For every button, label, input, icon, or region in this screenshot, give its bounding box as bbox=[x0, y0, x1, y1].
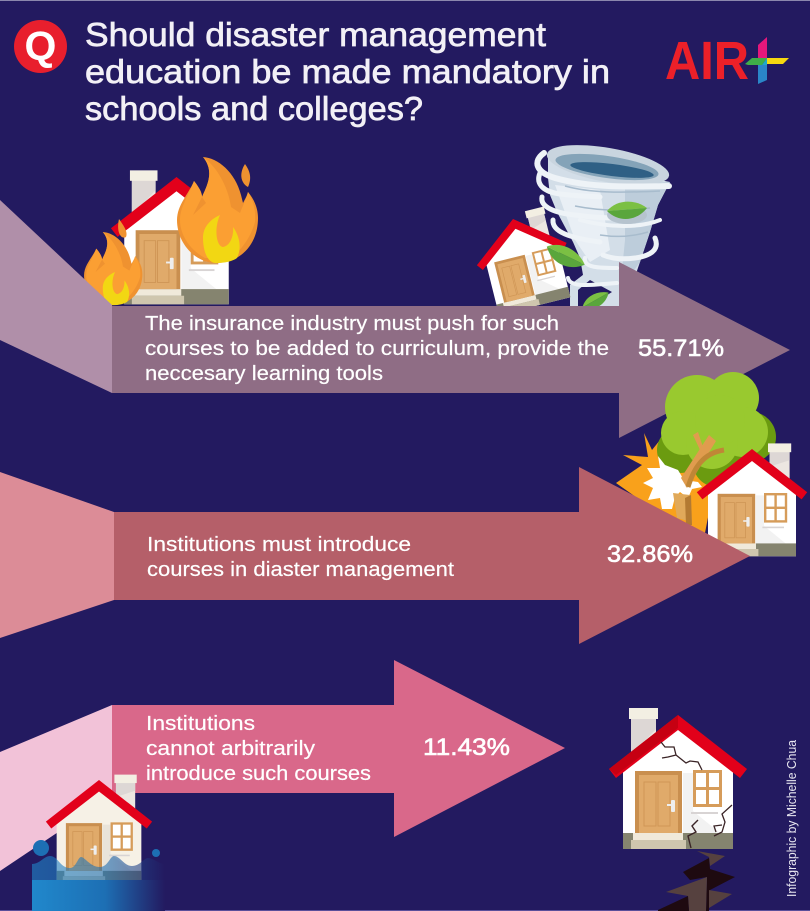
text: institutions must introduce: Institutions must introduce bbox=[147, 534, 411, 556]
icon: tornado with house bbox=[468, 137, 672, 317]
title: Should disaster management bbox=[85, 16, 546, 53]
text: institutions must introduce: courses in diaster management bbox=[147, 559, 454, 581]
title bbox=[85, 16, 610, 127]
text: insurance industry bbox=[145, 313, 609, 385]
icon: Q badge bbox=[14, 20, 67, 73]
value: 32.86%: 32.86% bbox=[607, 541, 693, 568]
arrow: 11.43% bbox=[0, 660, 565, 871]
text: insurance industry: neccesary learning tools bbox=[145, 363, 383, 385]
arrow: 32.86% bbox=[0, 467, 750, 644]
icon: Q badge: Q bbox=[25, 23, 56, 69]
title: schools and colleges? bbox=[85, 90, 423, 127]
logo: AIR+: AIR bbox=[665, 32, 749, 91]
text: insurance industry: courses to be added to curriculum, provide the bbox=[145, 338, 609, 360]
text: institutions cannot: introduce such courses bbox=[146, 763, 371, 785]
text: institutions cannot: Institutions bbox=[146, 713, 255, 735]
title: education be made mandatory in bbox=[85, 53, 610, 90]
icon: house on fire bbox=[84, 157, 258, 305]
text: institutions cannot: cannot arbitrarily bbox=[146, 738, 315, 760]
text: institutions must introduce bbox=[147, 534, 454, 581]
credit: Infographic by Michelle Chua bbox=[784, 739, 799, 897]
text: institutions cannot bbox=[146, 713, 371, 785]
text: insurance industry: The insurance industry must push for such bbox=[145, 313, 559, 335]
arrow: 55.71% bbox=[0, 200, 790, 438]
value: 11.43%: 11.43% bbox=[423, 734, 510, 761]
value: 55.71%: 55.71% bbox=[638, 335, 724, 362]
icon: flooded house bbox=[32, 775, 165, 911]
icon: tree falling on house bbox=[616, 372, 807, 556]
icon: earthquake house with crack bbox=[609, 708, 747, 911]
